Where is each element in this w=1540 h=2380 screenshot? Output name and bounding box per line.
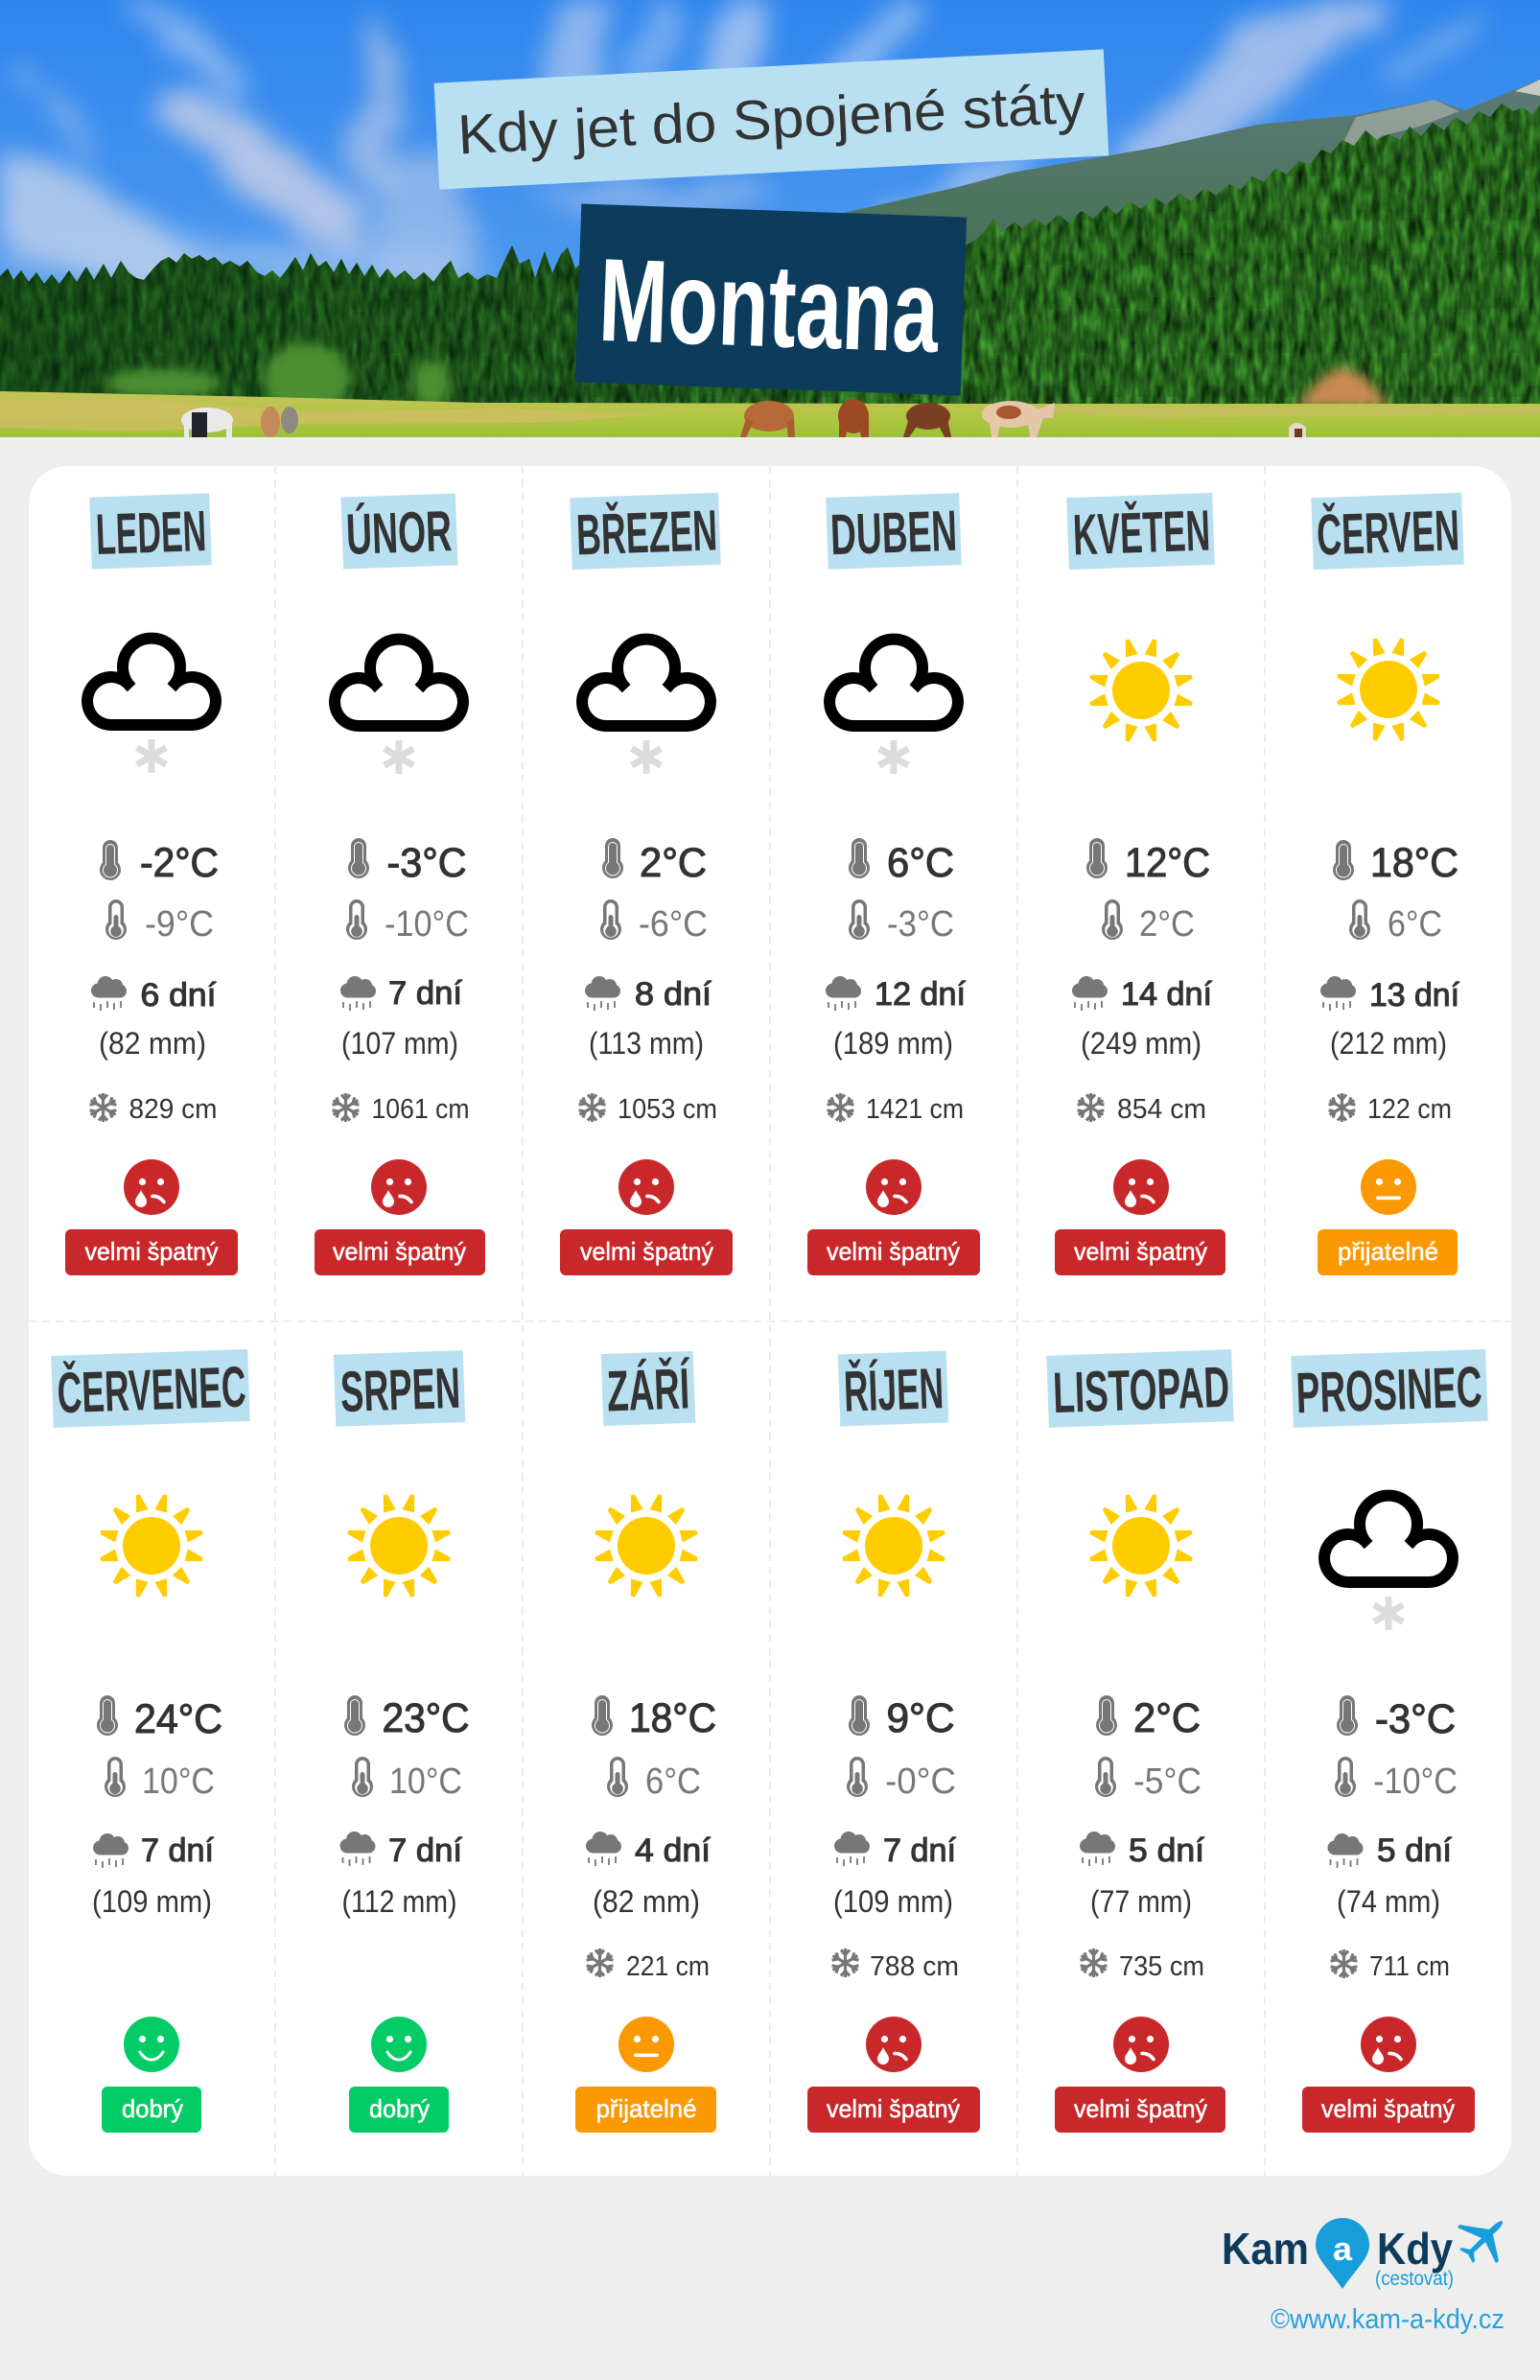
title box: Montana: Montana	[596, 235, 942, 378]
precipitation: (109 mm)	[92, 1884, 212, 1919]
high temperature	[348, 838, 466, 886]
icon: map pin	[1316, 2218, 1369, 2289]
icon: sun	[1088, 638, 1194, 743]
snowfall: 788 cm	[870, 1951, 959, 1982]
rating badge	[315, 1229, 485, 1275]
snowfall	[331, 1093, 470, 1125]
heading: Únor	[340, 493, 458, 570]
low temperature	[1095, 1757, 1202, 1802]
face: acceptable	[1361, 1159, 1416, 1215]
low temperature: -0°C	[885, 1762, 956, 1802]
rating badge: velmi špatný	[827, 1237, 960, 1266]
month panel: Duben	[807, 493, 980, 1275]
low temperature: 10°C	[389, 1762, 462, 1802]
high temperature: 18°C	[1370, 840, 1458, 886]
high temperature	[97, 1695, 222, 1742]
rainy days	[91, 976, 217, 1014]
snowfall	[585, 1948, 710, 1982]
logo: Kam a Kdy: Kdy	[1377, 2224, 1453, 2274]
snowfall	[830, 1948, 959, 1982]
heading: Srpen: SRPEN	[339, 1356, 461, 1424]
snowfall: 1053 cm	[618, 1094, 717, 1125]
heading: Listopad: LISTOPAD	[1052, 1355, 1230, 1425]
snowfall: 854 cm	[1117, 1094, 1206, 1125]
title box: Montana	[575, 204, 967, 395]
heading: Květen: KVĚTEN	[1072, 498, 1211, 567]
low temperature: -6°C	[639, 904, 708, 945]
rainy days: 5 dní	[1377, 1832, 1453, 1869]
high temperature	[344, 1695, 470, 1741]
precipitation: (249 mm)	[1081, 1026, 1202, 1061]
high temperature	[1086, 838, 1210, 886]
low temperature	[600, 899, 708, 945]
face: very bad	[1113, 1159, 1169, 1215]
rainy days: 6 dní	[140, 977, 217, 1014]
month panel: Březen	[560, 493, 733, 1275]
rating badge	[1055, 1229, 1225, 1275]
high temperature	[1333, 840, 1458, 886]
low temperature: -10°C	[1373, 1762, 1458, 1802]
low temperature: -10°C	[385, 904, 469, 945]
low temperature	[847, 1757, 956, 1802]
low temperature: -3°C	[887, 904, 954, 945]
month panel: Červenec	[51, 1349, 250, 2133]
precipitation: (107 mm)	[341, 1026, 458, 1061]
high temperature: -3°C	[387, 840, 466, 886]
precipitation: (77 mm)	[1090, 1884, 1192, 1919]
rainy days	[339, 1832, 463, 1869]
low temperature: 6°C	[1388, 904, 1442, 945]
month panel: Listopad	[1046, 1349, 1234, 2133]
rating badge	[1055, 2087, 1225, 2133]
rating badge: dobrý	[369, 2094, 430, 2123]
face: very bad	[1361, 2017, 1416, 2072]
precipitation: (189 mm)	[833, 1026, 953, 1061]
low temperature	[607, 1757, 701, 1802]
rating badge	[1318, 1229, 1458, 1275]
icon: sun	[594, 1493, 699, 1598]
rating badge	[560, 1229, 733, 1275]
face: good	[371, 2017, 427, 2072]
low temperature	[346, 899, 469, 945]
rainy days	[586, 1832, 712, 1869]
heading: Květen	[1066, 493, 1215, 570]
icon: snow cloud	[582, 640, 711, 774]
logo: Kam a Kdy: (cestovat)	[1375, 2268, 1454, 2290]
high temperature: 9°C	[886, 1695, 955, 1741]
snowfall: 122 cm	[1367, 1094, 1452, 1125]
face: acceptable	[618, 2017, 674, 2072]
snowfall	[1329, 1949, 1450, 1982]
low temperature: 2°C	[1139, 904, 1195, 945]
low temperature: -5°C	[1133, 1762, 1202, 1802]
rainy days: 7 dní	[388, 975, 463, 1012]
rating badge	[807, 2087, 980, 2133]
rainy days	[1320, 976, 1460, 1014]
rating badge: velmi špatný	[84, 1237, 219, 1266]
rainy days: 7 dní	[141, 1832, 215, 1869]
face: very bad	[124, 1159, 179, 1215]
icon: sun	[1336, 637, 1441, 742]
snowfall: 1421 cm	[866, 1094, 964, 1125]
rainy days	[826, 976, 967, 1013]
heading: Březen	[570, 493, 721, 570]
high temperature	[849, 838, 954, 886]
rainy days	[834, 1832, 957, 1869]
panel: monthly weather card	[29, 466, 1511, 2176]
high temperature	[849, 1695, 955, 1741]
icon: snow cloud	[87, 639, 216, 773]
heading: Červen	[1311, 493, 1464, 570]
month panel: Leden	[65, 493, 238, 1275]
rainy days: 8 dní	[635, 976, 712, 1013]
month panel: Červen	[1311, 493, 1464, 1275]
high temperature: 24°C	[134, 1696, 222, 1742]
low temperature	[105, 899, 214, 945]
logo: Kam a Kdy: Kam	[1222, 2224, 1309, 2274]
high temperature	[1337, 1695, 1456, 1742]
icon: sun	[346, 1493, 452, 1598]
heading: Leden	[89, 493, 212, 570]
face: very bad	[866, 2017, 922, 2072]
rating badge: dobrý	[122, 2094, 183, 2123]
face: very bad	[866, 1159, 922, 1215]
icon: snow cloud	[335, 640, 463, 774]
high temperature	[100, 840, 219, 886]
rating badge	[575, 2087, 716, 2133]
heading: Srpen	[334, 1350, 465, 1427]
precipitation: (109 mm)	[833, 1884, 953, 1919]
rating badge	[349, 2087, 449, 2133]
snowfall	[1076, 1093, 1206, 1125]
high temperature	[1096, 1695, 1201, 1741]
rating badge: velmi špatný	[333, 1237, 466, 1266]
high temperature: 12°C	[1125, 840, 1210, 886]
heading: Září: ZÁŘÍ	[606, 1356, 691, 1423]
hero photo: Montana landscape	[0, 0, 1540, 437]
month panel: Květen	[1055, 493, 1225, 1275]
rating badge: velmi špatný	[1074, 1237, 1207, 1266]
heading: Říjen	[838, 1351, 948, 1426]
snowfall	[1327, 1093, 1452, 1125]
rating badge: velmi špatný	[1074, 2094, 1207, 2123]
month panel: Říjen	[807, 1351, 980, 2133]
rating badge	[1302, 2087, 1475, 2133]
heading: Leden: LEDEN	[95, 499, 207, 567]
heading: Říjen: ŘÍJEN	[843, 1356, 945, 1424]
rainy days: 7 dní	[883, 1832, 957, 1869]
precipitation: (113 mm)	[589, 1026, 704, 1061]
snowfall: 711 cm	[1369, 1951, 1450, 1982]
low temperature	[1349, 899, 1442, 945]
rainy days: 12 dní	[875, 976, 967, 1013]
high temperature: 2°C	[640, 840, 707, 886]
heading: Červenec: ČERVENEC	[56, 1355, 247, 1425]
snowfall: 735 cm	[1119, 1951, 1204, 1982]
precipitation: (74 mm)	[1337, 1884, 1440, 1919]
rating badge: přijatelné	[1338, 1237, 1438, 1266]
heading: Září	[601, 1351, 695, 1426]
heading: Únor: ÚNOR	[345, 499, 453, 567]
rainy days	[1072, 976, 1213, 1013]
rating badge	[65, 1229, 238, 1275]
low temperature	[352, 1757, 462, 1802]
month panel: Září	[575, 1351, 716, 2133]
high temperature: 6°C	[887, 840, 954, 886]
high temperature: 18°C	[629, 1695, 716, 1741]
face: very bad	[618, 1159, 674, 1215]
high temperature: -3°C	[1375, 1696, 1456, 1742]
high temperature: -2°C	[140, 840, 219, 886]
rainy days: 14 dní	[1121, 976, 1213, 1013]
rating badge	[807, 1229, 980, 1275]
precipitation: (212 mm)	[1330, 1026, 1447, 1061]
subtitle ribbon	[434, 49, 1108, 190]
logo: Kam a Kdy	[1222, 2218, 1503, 2290]
icon: sun	[1088, 1493, 1194, 1598]
icon: snow cloud	[1324, 1496, 1453, 1630]
snowfall: 829 cm	[128, 1094, 217, 1125]
website url: ©www.kam-a-kdy.cz	[1271, 2304, 1505, 2335]
icon: plane	[1458, 2221, 1503, 2263]
snowfall	[577, 1093, 717, 1125]
precipitation: (82 mm)	[593, 1884, 700, 1919]
rainy days	[1080, 1832, 1205, 1869]
snowfall	[826, 1093, 964, 1125]
high temperature: 23°C	[382, 1695, 470, 1741]
subtitle ribbon: Kdy jet do Spojené státy	[456, 72, 1086, 167]
heading: Březen: BŘEZEN	[575, 498, 718, 567]
icon: sun	[99, 1493, 204, 1598]
rating badge: přijatelné	[596, 2094, 696, 2123]
month panel: Únor	[315, 493, 485, 1275]
meadow	[0, 391, 1540, 437]
heading: Duben: DUBEN	[829, 499, 958, 567]
high temperature	[602, 838, 707, 886]
low temperature: 6°C	[645, 1762, 701, 1802]
rating badge: velmi špatný	[1321, 2094, 1455, 2123]
high temperature	[592, 1695, 716, 1741]
rainy days	[585, 976, 712, 1013]
rainy days	[93, 1832, 215, 1869]
snowfall	[1079, 1948, 1204, 1982]
heading: Červenec	[51, 1349, 250, 1428]
precipitation: (82 mm)	[99, 1026, 206, 1061]
rainy days: 5 dní	[1129, 1832, 1205, 1869]
month panel: Prosinec	[1291, 1349, 1488, 2133]
rating badge: velmi špatný	[580, 1237, 713, 1266]
icon: snow cloud	[829, 640, 958, 774]
face: good	[124, 2017, 179, 2072]
low temperature: -9°C	[145, 904, 214, 945]
icon: map pin: a	[1333, 2231, 1353, 2268]
month panel: Srpen	[334, 1350, 470, 2133]
high temperature: 2°C	[1133, 1695, 1201, 1741]
snowfall	[88, 1093, 218, 1125]
snowfall: 221 cm	[626, 1951, 710, 1982]
icon: sun	[841, 1493, 946, 1598]
face: very bad	[371, 1159, 427, 1215]
rating badge: velmi špatný	[827, 2094, 960, 2123]
low temperature	[1335, 1757, 1458, 1802]
low temperature	[105, 1757, 215, 1802]
rainy days: 13 dní	[1369, 977, 1460, 1014]
mountain	[844, 80, 1540, 307]
snowfall: 1061 cm	[372, 1094, 470, 1125]
forest	[0, 86, 1540, 415]
rainy days	[1327, 1832, 1453, 1869]
rainy days	[340, 975, 463, 1012]
low temperature	[849, 899, 954, 945]
low temperature: 10°C	[142, 1762, 215, 1802]
heading: Duben	[826, 493, 962, 570]
low temperature	[1102, 899, 1195, 945]
heading: Listopad	[1046, 1349, 1234, 1428]
face: very bad	[1113, 2017, 1169, 2072]
rainy days: 4 dní	[635, 1832, 712, 1869]
rainy days: 7 dní	[388, 1832, 463, 1869]
precipitation: (112 mm)	[341, 1884, 456, 1919]
rating badge	[102, 2087, 201, 2133]
horses	[181, 399, 1306, 437]
